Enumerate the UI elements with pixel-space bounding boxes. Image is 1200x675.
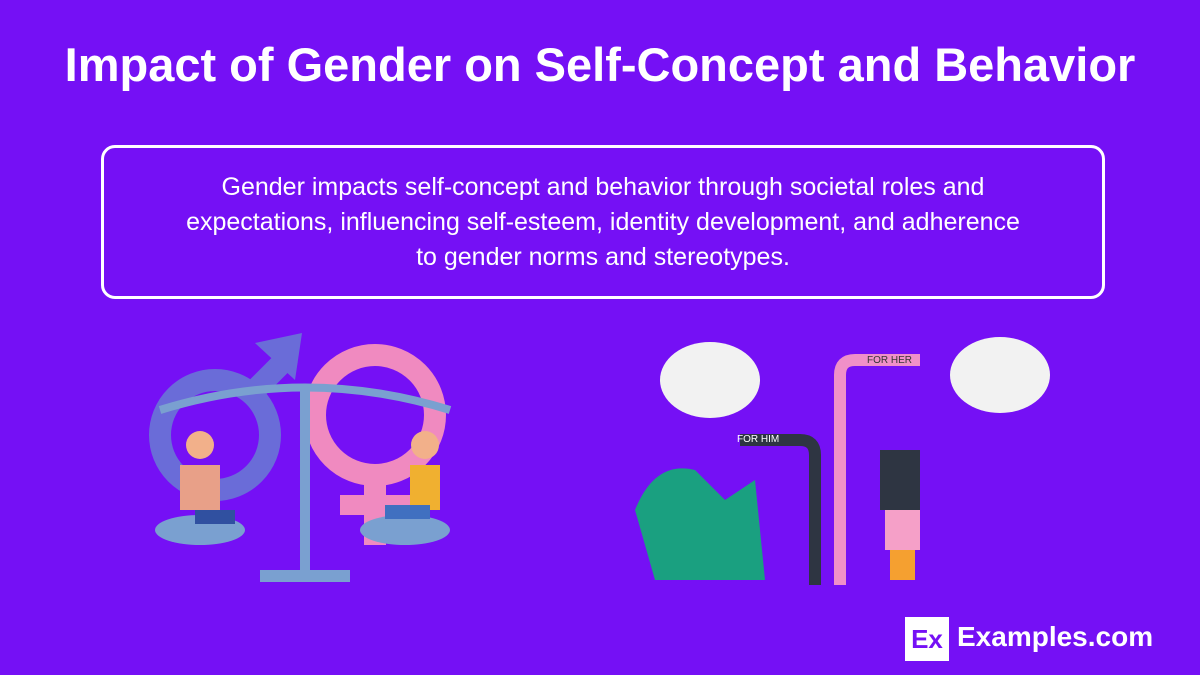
logo icon: Ex — [911, 624, 943, 654]
logo — [905, 617, 1153, 661]
illustration: crossroads for him / for her — [635, 337, 1050, 585]
logo text: Examples.com — [957, 621, 1153, 652]
description box — [101, 145, 1105, 299]
logo icon — [905, 617, 949, 661]
description box: Gender impacts self-concept and behavior through societal roles and expectations, influencing self-esteem, identity development, and adherence to gender norms and stereotypes. — [186, 172, 1020, 270]
illustration: crossroads for him / for her: FOR HER — [867, 355, 912, 366]
illustration: crossroads for him / for her: FOR HIM — [737, 434, 779, 445]
illustration: scale with gender symbols — [149, 333, 452, 582]
title: Impact of Gender on Self-Concept and Behavior — [65, 38, 1135, 91]
